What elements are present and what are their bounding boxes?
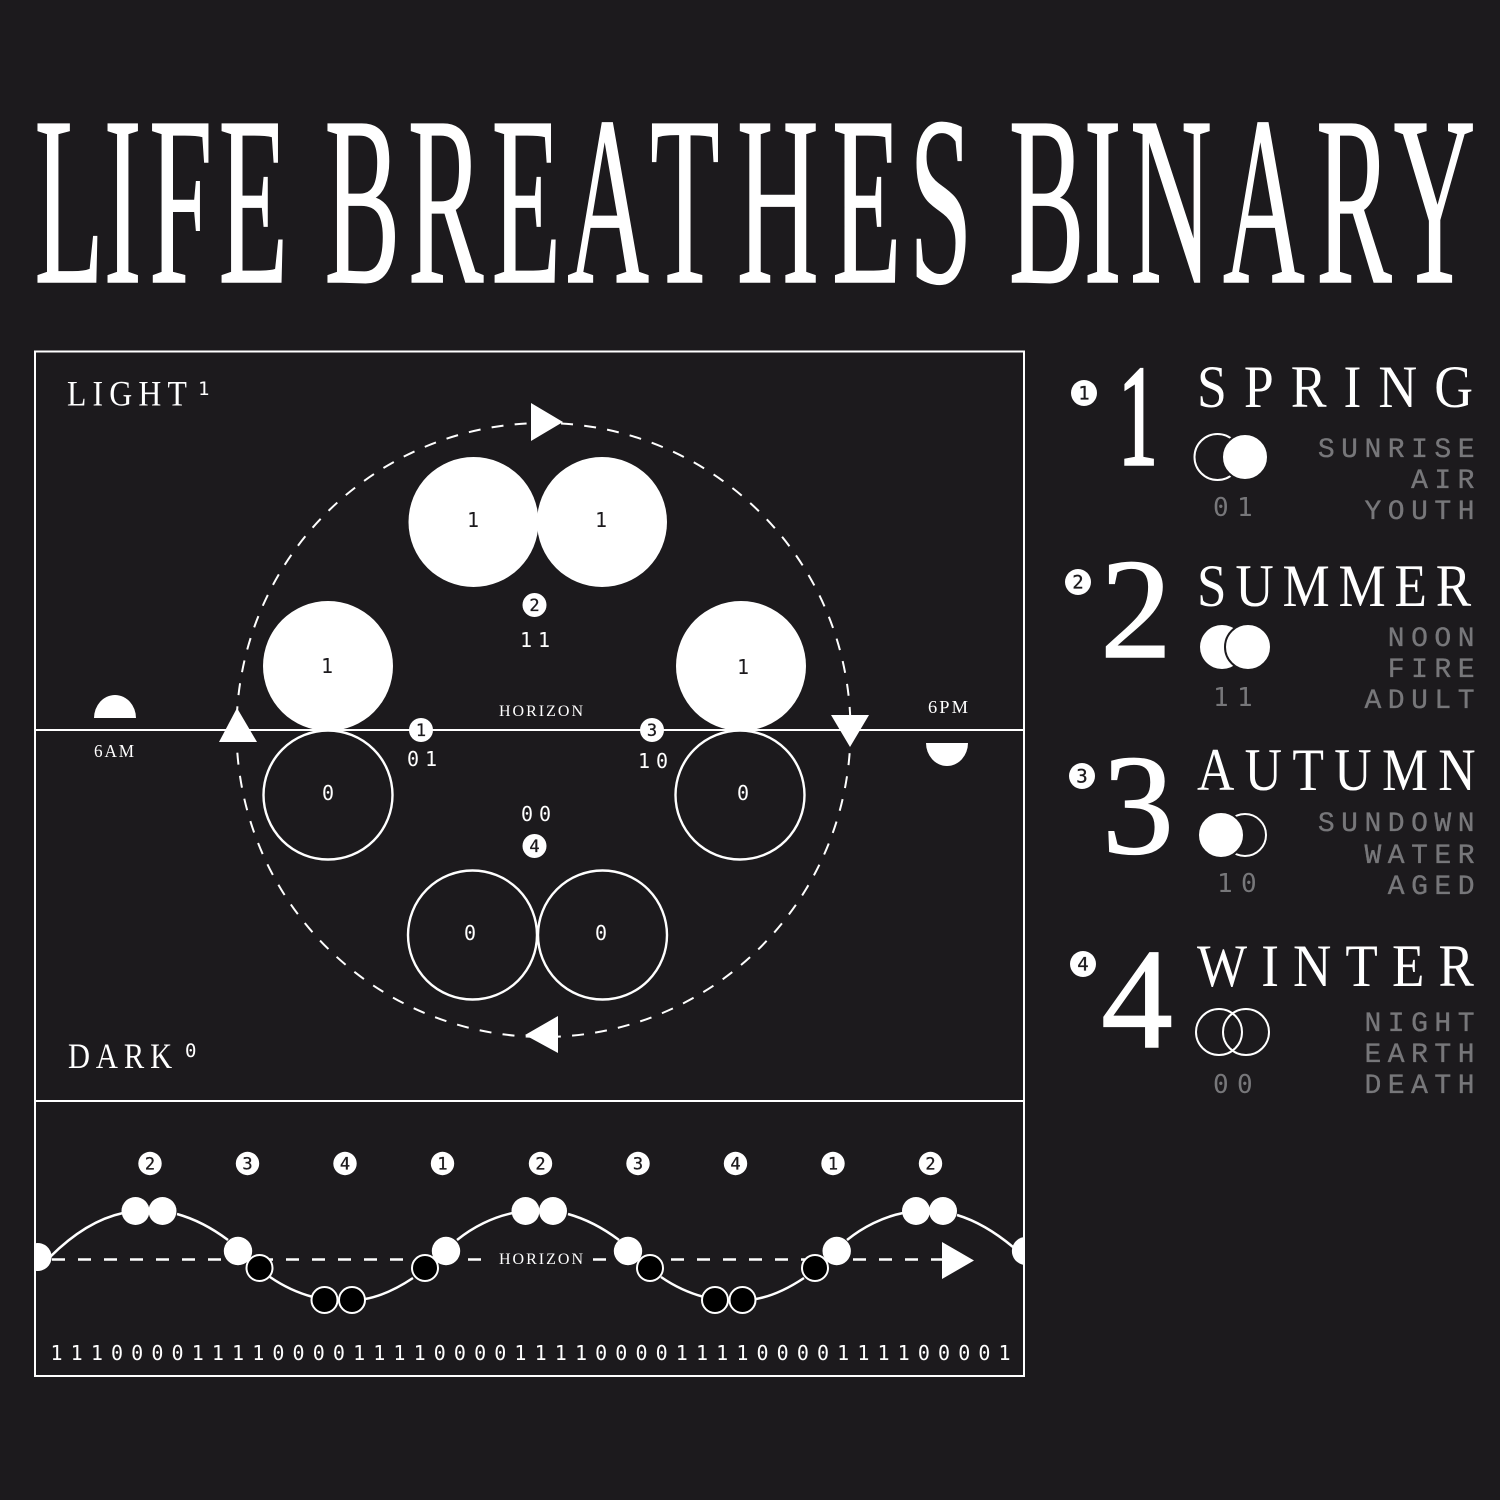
venn icon 10	[1198, 812, 1266, 858]
wave curve	[50, 1213, 1013, 1299]
season badges row	[138, 1152, 942, 1175]
badge 2 with code 11: 11	[520, 628, 556, 652]
dark dots	[246, 1255, 828, 1313]
legend: summer: ADULT	[1364, 686, 1481, 717]
legend: spring	[1071, 336, 1490, 528]
badge 4 with code 00: 4	[529, 837, 540, 857]
legend: autumn: 10	[1217, 869, 1265, 899]
badge 2 with code 11: 2	[529, 596, 540, 616]
legend: winter: DEATH	[1364, 1071, 1481, 1102]
legend: spring: YOUTH	[1364, 497, 1481, 528]
dashed orbit	[236, 423, 850, 1037]
label: dark: DARK	[68, 1036, 178, 1076]
dashed horizon with arrow	[52, 1242, 974, 1279]
legend: summer: 2	[1100, 530, 1172, 688]
legend: autumn: 3	[1076, 766, 1088, 788]
light circle, season 1	[263, 601, 393, 731]
light circles, season 2: 1	[467, 508, 479, 532]
panel: binary wave timeline	[35, 1101, 1024, 1376]
season badges row: 1	[828, 1154, 838, 1174]
light circles, season 2: 1	[595, 508, 607, 532]
legend: summer	[1065, 530, 1481, 717]
legend: winter: EARTH	[1364, 1040, 1481, 1071]
legend: spring: 1	[1118, 336, 1158, 495]
badge 3 with code 10: 10	[638, 749, 674, 773]
legend: spring: AIR	[1411, 466, 1481, 497]
venn icon 01	[1194, 434, 1268, 480]
legend: spring: 1	[1078, 382, 1090, 404]
legend: autumn	[1069, 726, 1486, 903]
legend: winter: 4	[1077, 954, 1089, 976]
badge 3 with code 10: 3	[647, 721, 657, 741]
label: horizon: HORIZON	[499, 703, 585, 720]
legend: autumn: SUNDOWN	[1318, 809, 1481, 840]
label: 6PM: 6PM	[928, 697, 970, 717]
legend: spring: 01	[1213, 493, 1261, 523]
legend: summer: 2	[1072, 572, 1084, 594]
sunrise half circle	[94, 695, 136, 718]
badge 1 with code 01: 01	[407, 747, 443, 771]
dark circle, season 3: 0	[737, 781, 749, 805]
light circle, season 1: 1	[321, 654, 333, 678]
dark circles, season 4	[408, 870, 667, 1000]
arrow: down	[831, 715, 869, 747]
legend: autumn: WATER	[1364, 841, 1481, 872]
dark circle, season 1	[264, 730, 392, 860]
badge 1 with code 01: 1	[416, 721, 426, 741]
arrow: left	[525, 1016, 558, 1053]
badge 3 with code 10	[638, 718, 674, 773]
venn icon 11	[1200, 624, 1271, 670]
season badges row: 2	[145, 1154, 155, 1174]
dark circle, season 1: 0	[322, 781, 334, 805]
label: horizon: HORIZON	[499, 1251, 585, 1268]
season badges row: 2	[535, 1154, 546, 1174]
season badges row: 3	[242, 1154, 253, 1174]
legend: winter: 00	[1213, 1070, 1261, 1100]
legend: winter: NIGHT	[1364, 1009, 1481, 1040]
title: LIFE BREATHES BINARY	[35, 67, 1475, 334]
badge 2 with code 11	[520, 593, 556, 652]
season badges row: 2	[925, 1154, 936, 1174]
light circles, season 2	[408, 457, 667, 587]
label: light: LIGHT	[67, 374, 193, 414]
badge 1 with code 01	[407, 718, 443, 771]
badge 4 with code 00: 00	[521, 802, 557, 826]
badge 4 with code 00	[521, 802, 557, 858]
label: dark: 0	[185, 1040, 196, 1062]
legend: winter	[1070, 920, 1488, 1102]
legend: winter: 4	[1101, 920, 1173, 1078]
label: 6AM: 6AM	[94, 741, 136, 761]
light circle, season 3	[676, 601, 806, 731]
arrow: right	[531, 403, 563, 441]
light dots	[36, 1197, 1023, 1271]
arrow: up	[219, 708, 257, 742]
season badges row: 4	[340, 1154, 350, 1174]
panel: day cycle diagram	[35, 352, 1024, 1101]
legend: summer: 11	[1213, 683, 1261, 713]
season badges row: 3	[633, 1154, 643, 1174]
season badges row: 1	[437, 1154, 448, 1174]
venn icon 00	[1196, 1009, 1269, 1055]
legend: autumn: 3	[1102, 726, 1174, 884]
label: light: 1	[198, 378, 209, 400]
light circle, season 3: 1	[737, 655, 749, 679]
sunset half circle	[926, 743, 968, 766]
season badges row: 4	[730, 1154, 741, 1174]
legend: summer: NOON	[1388, 624, 1481, 655]
legend: autumn: AGED	[1388, 872, 1481, 903]
legend: spring: SUNRISE	[1318, 435, 1481, 466]
dark circle, season 3	[676, 730, 804, 860]
legend: summer: FIRE	[1388, 655, 1481, 686]
binary sequence: 111000011110000111100001111000011110000111100001	[50, 1341, 1019, 1365]
dark circles, season 4: 0	[464, 921, 476, 945]
dark circles, season 4: 0	[595, 921, 607, 945]
